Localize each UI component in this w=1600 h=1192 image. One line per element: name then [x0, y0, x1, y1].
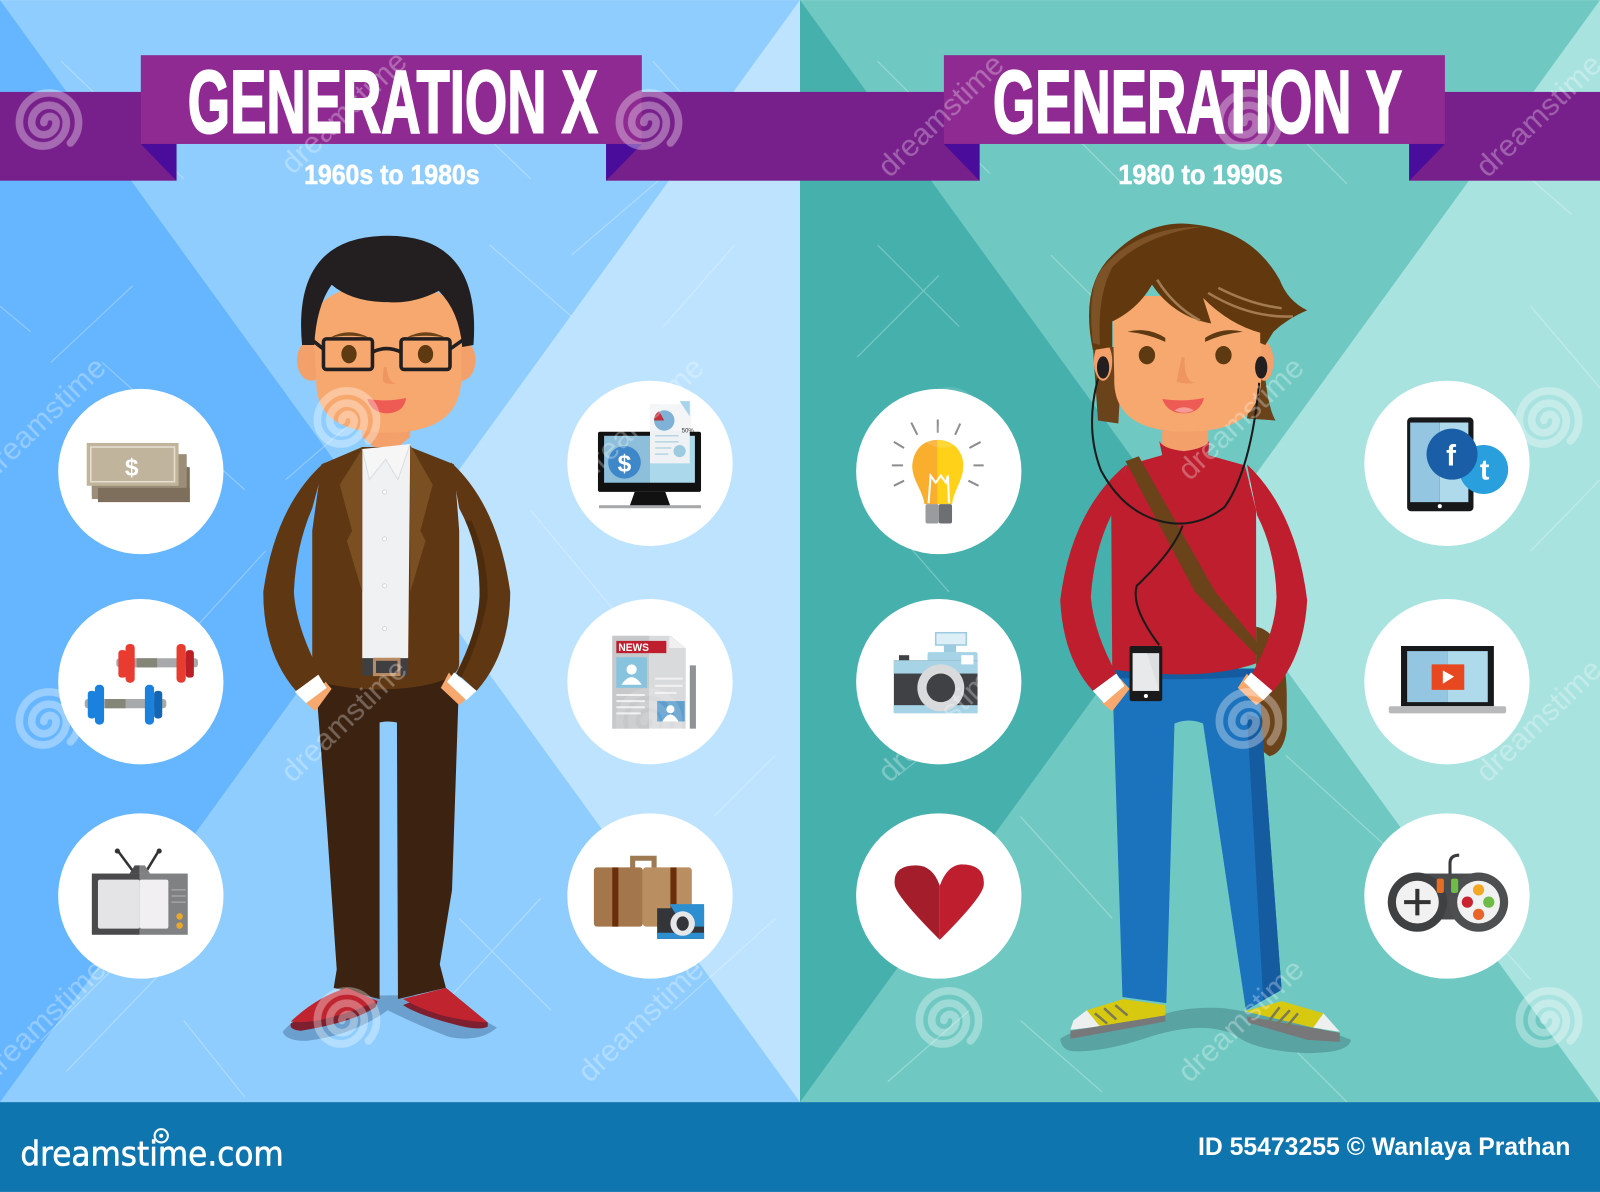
circle icon: computer with report: 50%: [682, 428, 694, 435]
circle icon: television: [58, 813, 223, 979]
left arm: [263, 462, 324, 691]
subtitle: generation x years: 1960s to 1980s: [304, 159, 480, 190]
messenger bag: [1256, 627, 1287, 756]
eyebrows: [1128, 330, 1243, 342]
watermark: dreamstime text: dreamstime: [274, 44, 414, 181]
watermark: dreamstime text: dreamstime: [871, 652, 1011, 789]
ribbon: connecting purple band: [0, 92, 1600, 181]
panel: generation x background: [0, 0, 800, 1102]
jeans: [1112, 668, 1282, 1010]
bag strap: [1126, 456, 1259, 655]
watermark: dreamstime text: dreamstime: [871, 47, 1011, 184]
circle icon: tablet with social media: f: [1446, 439, 1456, 472]
circle icon: light bulb: [856, 389, 1021, 554]
footer credit text: ID 55473255 © Wanlaya Prathan: [1198, 1133, 1570, 1161]
character: generation x man: [263, 236, 510, 1041]
earphones and wire: [1092, 356, 1267, 645]
footer bar: [0, 1102, 1600, 1192]
hands and cuffs: [1093, 673, 1272, 711]
circle icon: laptop video: [1364, 599, 1530, 764]
smartphone: [1130, 646, 1162, 701]
footer logo text: dreamstime.com: [20, 1134, 284, 1173]
left hand and cuff: [295, 675, 332, 711]
watermark: dreamstime text: dreamstime: [274, 652, 414, 789]
right arm: [451, 462, 510, 691]
neck: [1162, 413, 1208, 454]
right sleeve: [1247, 464, 1307, 693]
heading: generation x: GENERATION X: [188, 53, 598, 152]
brown jacket: [312, 447, 459, 689]
banner: generation x: [141, 53, 642, 181]
left sleeve: [1060, 464, 1127, 691]
eyes: [1139, 346, 1232, 364]
circle icon: suitcase and camera: [567, 813, 733, 979]
red shoes: [291, 988, 488, 1031]
red sweater: [1111, 441, 1256, 674]
circle icon: game controller: [1364, 813, 1530, 979]
circle icon: computer with report: [567, 381, 733, 546]
white shirt: [362, 444, 410, 658]
circle icon: newspaper: NEWS: [618, 642, 649, 654]
circle icon: heart: [856, 813, 1021, 979]
nose: [383, 367, 396, 384]
circle icon: money: $: [125, 455, 139, 482]
panel: generation y background: [800, 0, 1600, 1102]
banner: generation y: [944, 53, 1445, 181]
mouth: [1162, 398, 1204, 413]
watermark: dreamstime text: dreamstime: [1171, 350, 1311, 487]
nose: [1177, 357, 1195, 384]
watermark: dreamstime text: dreamstime: [571, 350, 711, 487]
watermark: dreamstime text: dreamstime: [1171, 952, 1311, 1089]
right hand and cuff: [441, 673, 477, 705]
watermark: dreamstime text: dreamstime: [571, 952, 711, 1089]
head: [297, 236, 476, 433]
trousers: [315, 676, 459, 999]
sneakers: [1070, 999, 1340, 1042]
watermark: spirals: [19, 93, 1579, 1044]
eyes: [341, 345, 433, 363]
lapels: [340, 445, 433, 592]
circle icon: tablet with social media: [1364, 381, 1530, 546]
character: generation y person: [1060, 224, 1351, 1053]
neck: [362, 408, 410, 457]
circle icon: camera: [856, 599, 1021, 764]
circle icon: computer with report: $: [618, 451, 632, 478]
eyebrows: [330, 332, 446, 338]
shoe shadow: [1060, 1008, 1351, 1053]
shoe shadow: [283, 995, 497, 1041]
mouth: [367, 398, 406, 413]
circle icon: dumbbells: [58, 599, 223, 764]
subtitle: generation y years: 1980 to 1990s: [1118, 159, 1283, 190]
head and hair: [1089, 224, 1307, 432]
belt and buckle: [362, 658, 408, 676]
circle icon: newspaper: [567, 599, 733, 764]
circle icon: money: [58, 389, 223, 554]
circle icon: tablet with social media: t: [1480, 455, 1490, 487]
glasses: [308, 337, 467, 369]
